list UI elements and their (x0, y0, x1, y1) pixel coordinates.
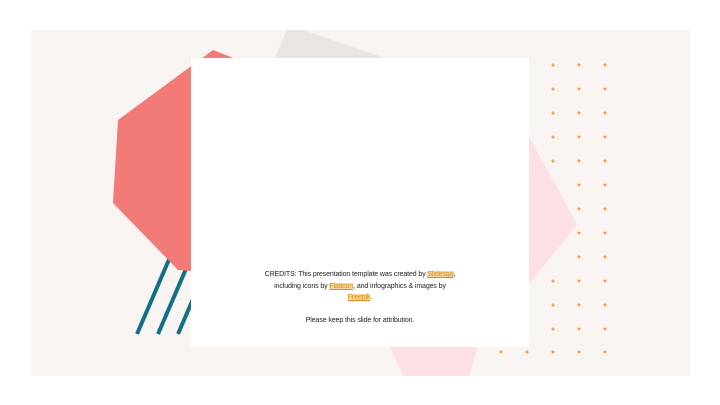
pink shape (430, 110, 577, 300)
credits text: Please keep this slide for attribution. (306, 317, 414, 324)
credits text: including icons by Flaticon, and infographics & images by (274, 282, 446, 290)
grey shape (265, 30, 420, 120)
credits text: Freepik. (348, 294, 372, 301)
red hexagon (113, 50, 300, 275)
credits text (265, 270, 455, 324)
credits text: CREDITS: This presentation template was created by Slidesgo, (265, 271, 455, 278)
pink bottom shape (387, 340, 480, 376)
white card (191, 58, 529, 347)
teal stripes (137, 234, 221, 334)
dot grid (500, 64, 606, 354)
